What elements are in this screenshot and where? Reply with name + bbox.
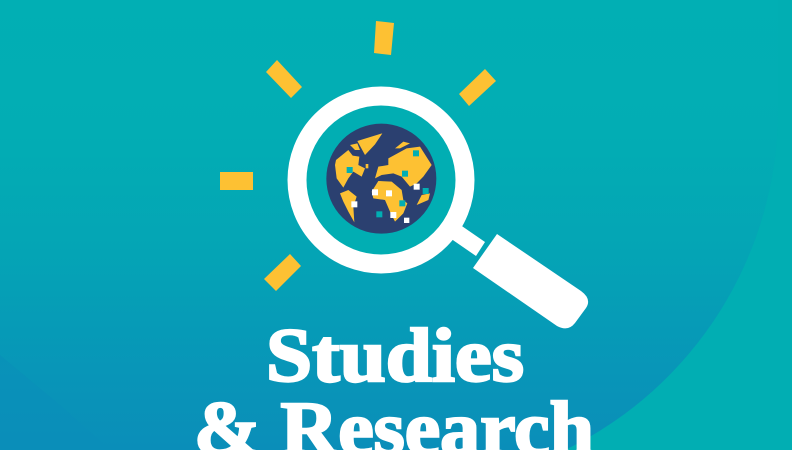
ray: top [374,21,394,55]
right teal curved region [565,0,792,450]
globe [326,124,436,234]
magnifying glass [297,96,588,328]
handle connector [447,222,485,256]
ray: upper right [459,69,496,106]
ray: left [220,172,253,190]
lens teal fill [301,100,461,260]
continents [335,133,432,222]
title [197,326,592,450]
ray: upper left [266,60,302,98]
teal data points [347,150,429,217]
lower-left shadow band [0,355,110,450]
lens white ring [297,96,465,264]
globe disc [326,124,436,234]
white data points [351,184,420,223]
handle [473,234,588,328]
light rays [220,21,496,291]
ray: lower left [264,254,301,291]
title line 1: Studies [266,314,524,398]
